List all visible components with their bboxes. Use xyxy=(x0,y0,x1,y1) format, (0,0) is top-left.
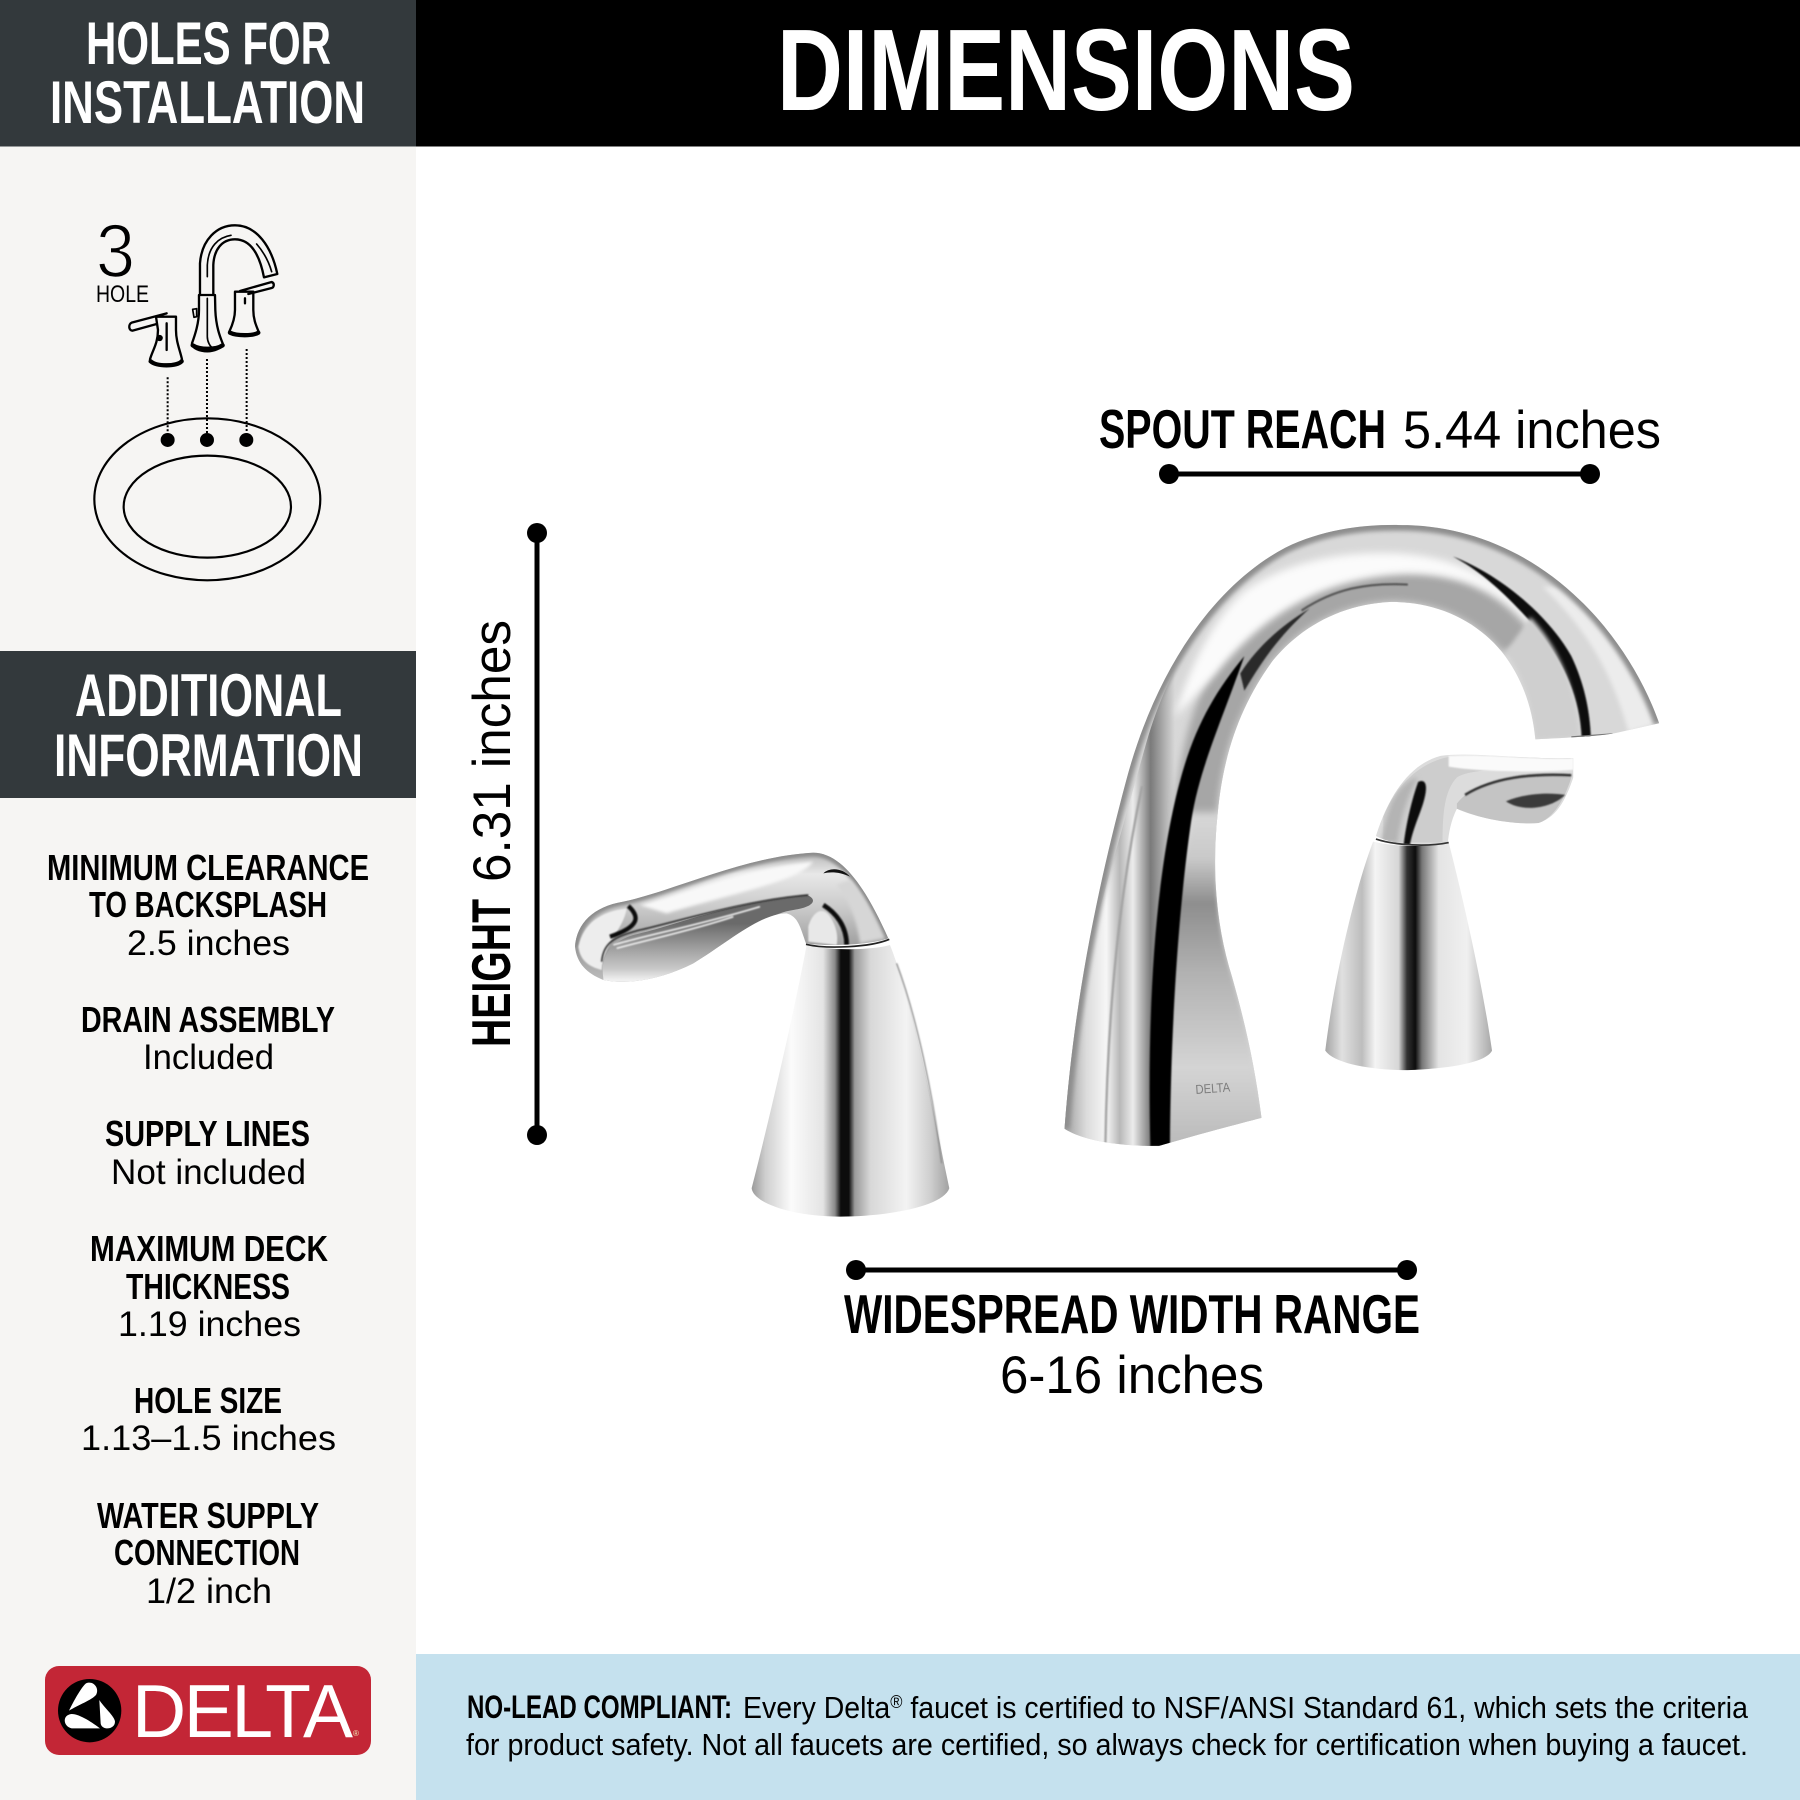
3 hole label: 3 xyxy=(96,209,135,293)
dimension: spout reach: SPOUT REACH xyxy=(1099,398,1386,460)
spec: minimum clearance to backsplash: MINIMUM CLEARANCE xyxy=(47,847,369,888)
spec: drain assembly: DRAIN ASSEMBLY xyxy=(81,999,335,1040)
dimension: spout reach xyxy=(1099,398,1661,484)
logo: delta: DELTA xyxy=(132,1669,353,1753)
icon: 3 hole faucet and sink diagram xyxy=(94,209,320,580)
title bar: dimensions xyxy=(416,0,1800,146)
spec: minimum clearance to backsplash xyxy=(47,847,369,963)
icon: delta emblem xyxy=(58,1679,121,1742)
sink line drawing xyxy=(94,349,320,580)
spec: hole size: HOLE SIZE xyxy=(134,1380,282,1421)
spec: water supply connection: 1/2 inch xyxy=(146,1572,272,1611)
logo: delta: ® xyxy=(353,1729,359,1738)
spec: supply lines xyxy=(105,1113,310,1192)
dimension: widespread width range: WIDESPREAD WIDTH RANGE xyxy=(844,1283,1420,1345)
heading: holes for installation xyxy=(0,0,416,146)
product: left handle xyxy=(570,847,949,1217)
faucet logo mark: DELTA xyxy=(1195,1080,1231,1097)
spec: maximum deck thickness: 1.19 inches xyxy=(118,1305,301,1344)
spec: supply lines: SUPPLY LINES xyxy=(105,1113,310,1154)
dimension: widespread width range: 6-16 inches xyxy=(1000,1346,1264,1405)
mini faucet line drawing xyxy=(129,225,277,365)
title: DIMENSIONS xyxy=(777,5,1355,135)
right handle cone xyxy=(1325,842,1492,1070)
heading: holes for installation: HOLES FOR xyxy=(86,10,331,77)
spec: maximum deck thickness: THICKNESS xyxy=(126,1266,290,1307)
dimension: spout reach: 5.44 inches xyxy=(1403,401,1661,460)
panel: left sidebar xyxy=(0,0,416,1800)
callout: no-lead compliant: ® xyxy=(890,1692,902,1712)
spec: drain assembly xyxy=(81,999,335,1077)
faucet spout xyxy=(1056,517,1669,1155)
spec: minimum clearance to backsplash: 2.5 inches xyxy=(127,924,290,963)
spec: maximum deck thickness: MAXIMUM DECK xyxy=(90,1228,328,1269)
spec: maximum deck thickness xyxy=(90,1228,328,1344)
right handle lever xyxy=(1376,754,1574,844)
heading: additional information: INFORMATION xyxy=(54,722,363,789)
heading: holes for installation: INSTALLATION xyxy=(50,69,365,136)
spec: supply lines: Not included xyxy=(111,1153,306,1192)
callout: no-lead compliant: NO-LEAD COMPLIANT: xyxy=(467,1689,732,1725)
spec: water supply connection xyxy=(97,1495,319,1611)
spec: drain assembly: Included xyxy=(143,1038,274,1077)
3 hole label xyxy=(96,209,149,308)
handle cone xyxy=(752,945,949,1217)
spec: water supply connection: WATER SUPPLY xyxy=(97,1495,319,1536)
spec: minimum clearance to backsplash: TO BACKSPLASH xyxy=(89,884,327,925)
dimension: widespread width range xyxy=(844,1260,1420,1405)
spec: hole size: 1.13–1.5 inches xyxy=(81,1419,336,1458)
heading: additional information: ADDITIONAL xyxy=(75,662,342,729)
heading: additional information xyxy=(0,651,416,798)
callout: no-lead compliant: Every Delta xyxy=(743,1690,903,1725)
callout: no-lead compliant xyxy=(416,1654,1800,1800)
dimension: height: HEIGHT xyxy=(460,899,522,1047)
spec: hole size xyxy=(81,1380,336,1458)
dimension: height: 6.31 inches xyxy=(463,620,522,882)
logo: delta xyxy=(45,1666,371,1755)
handle lever xyxy=(575,852,888,982)
spec: water supply connection: CONNECTION xyxy=(114,1532,300,1573)
product: spout and right handle xyxy=(1056,517,1669,1155)
callout: no-lead compliant: faucet is certified to NSF/ANSI Standard 61, which sets the criteria xyxy=(902,1690,1749,1725)
dimension: height xyxy=(460,523,547,1145)
3 hole label: HOLE xyxy=(96,281,149,308)
